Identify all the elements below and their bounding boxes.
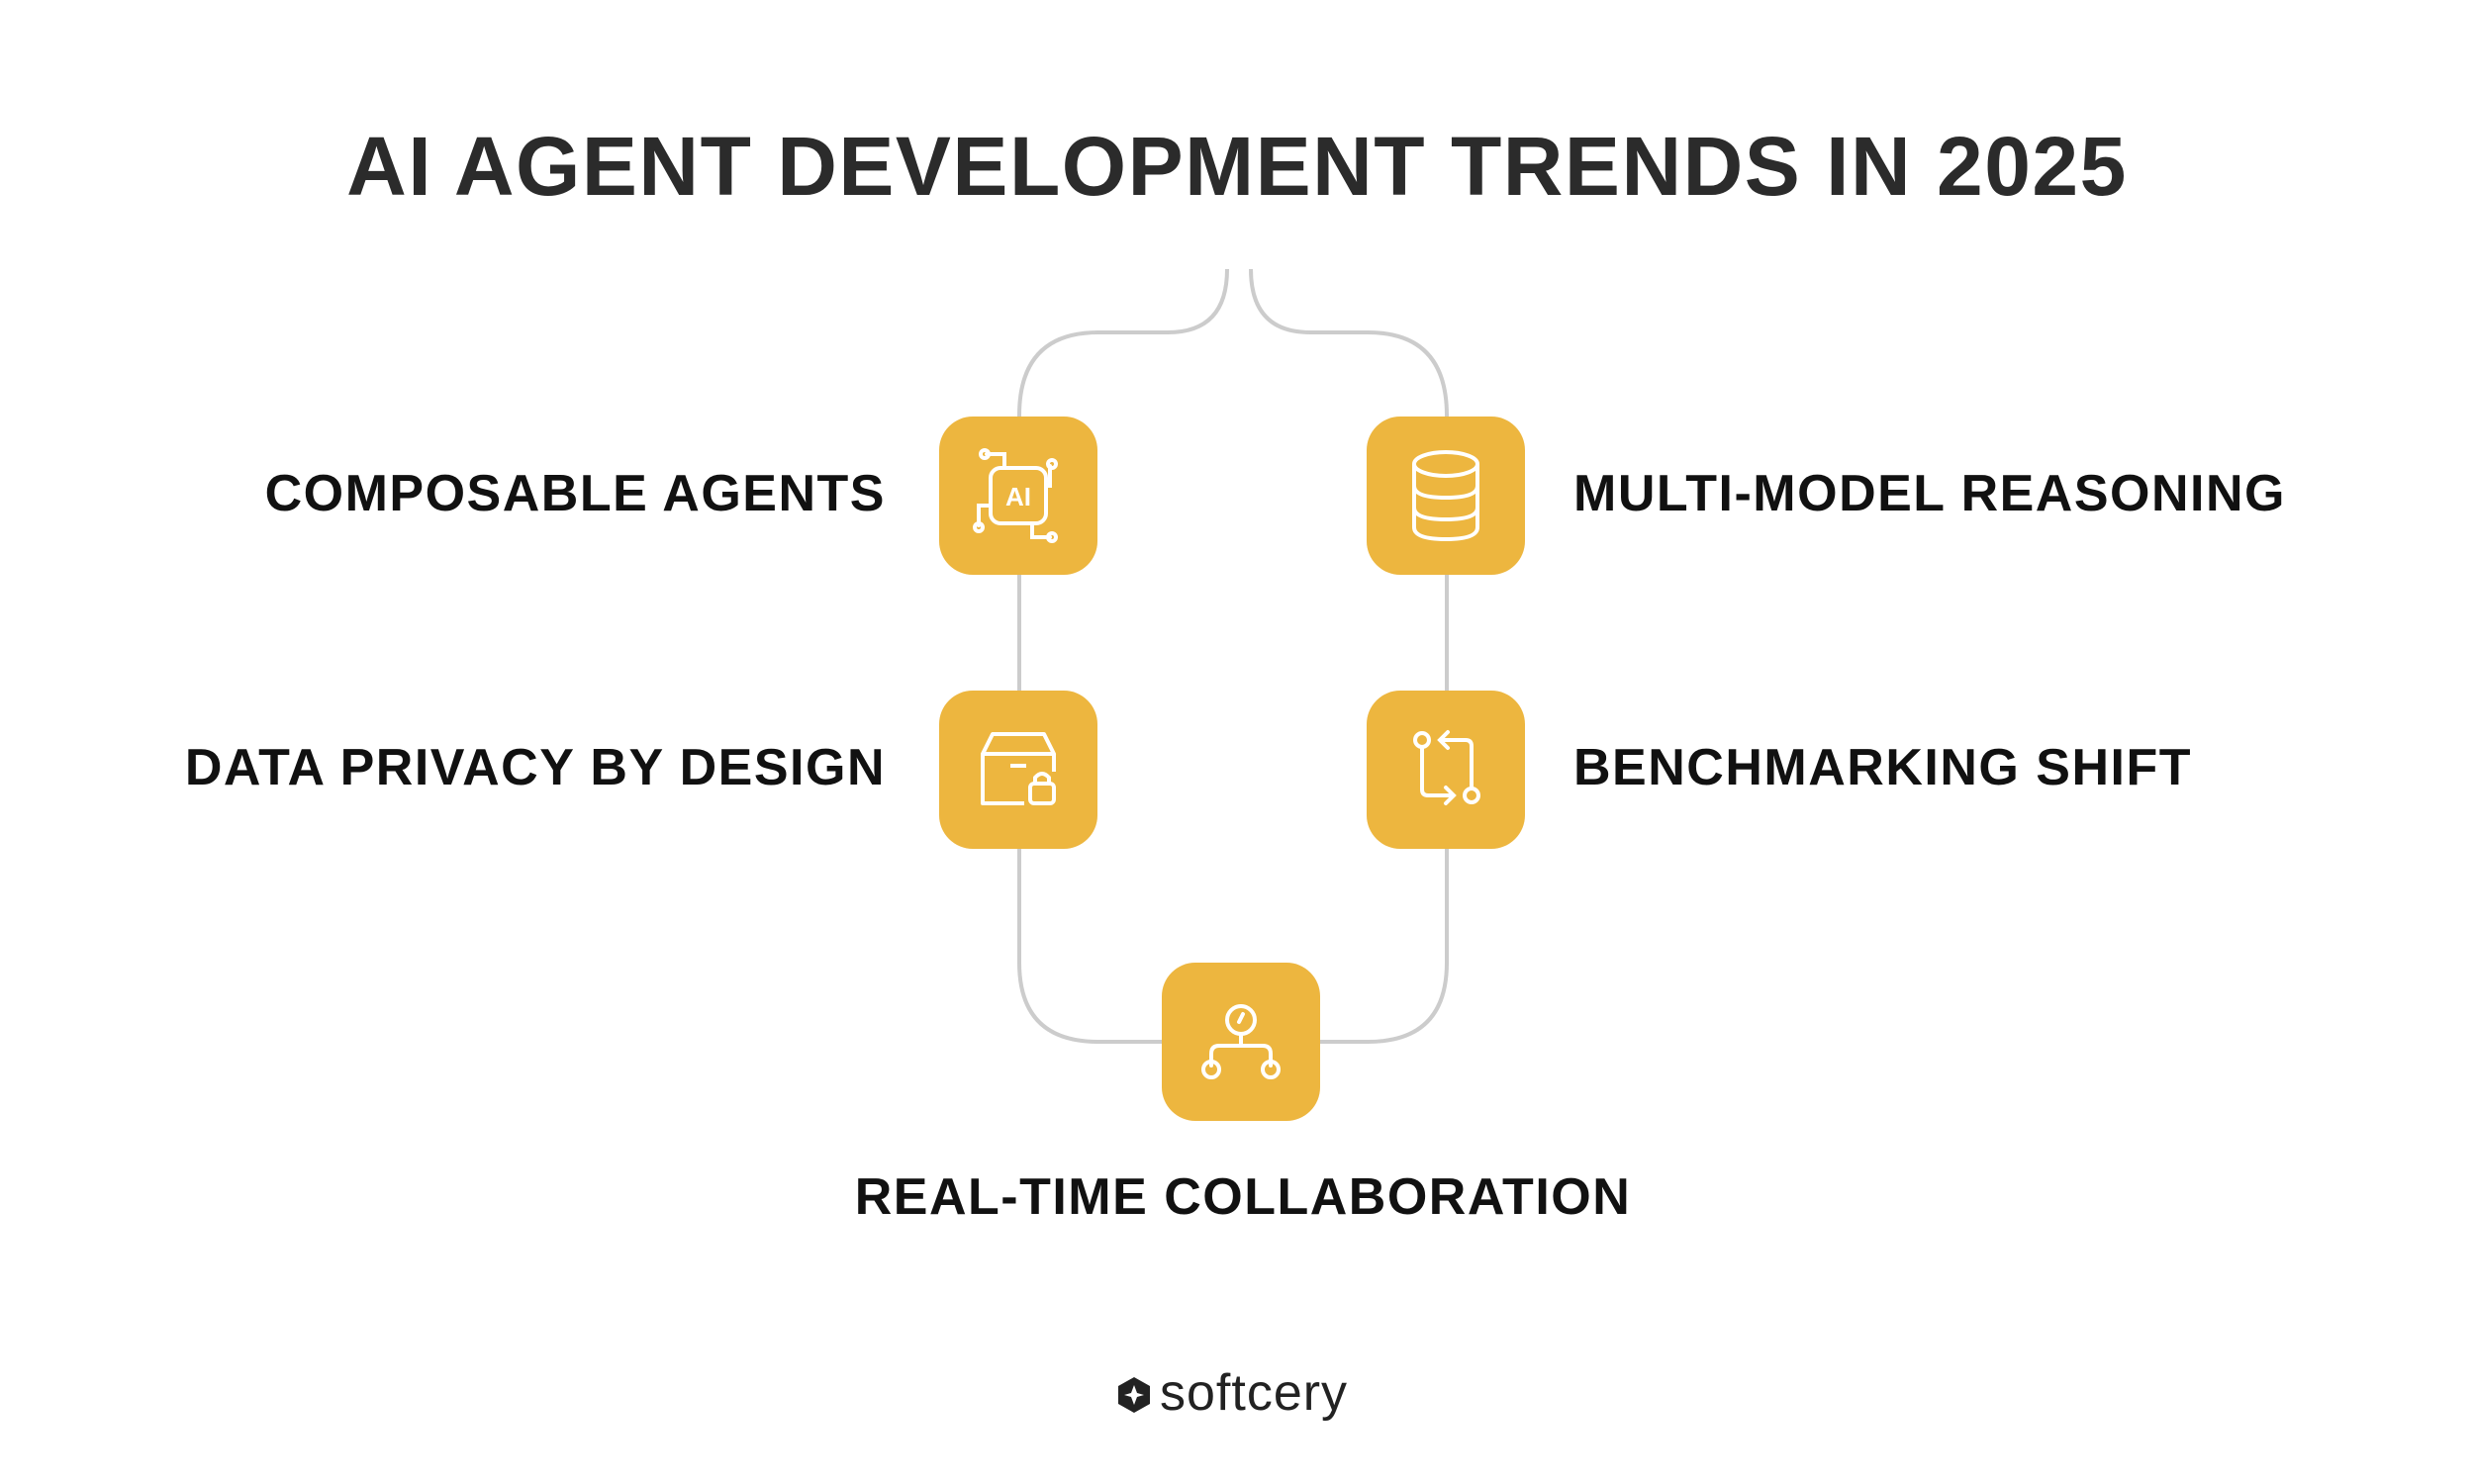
icon: composable agents — [939, 417, 1097, 575]
logo: softcery — [1160, 1364, 1348, 1422]
label: benchmarking shift: BENCHMARKING SHIFT — [1573, 739, 2192, 796]
label: data privacy: DATA PRIVACY BY DESIGN — [185, 739, 886, 796]
icon: composable agents: AI — [1005, 482, 1031, 511]
icon: benchmarking shift — [1367, 691, 1525, 849]
label: multi-model reasoning: MULTI-MODEL REASONING — [1573, 465, 2286, 522]
label: composable agents: COMPOSABLE AGENTS — [265, 465, 886, 522]
icon: data privacy — [939, 691, 1097, 849]
icon: multi-model reasoning — [1367, 417, 1525, 575]
label: real-time collaboration: REAL-TIME COLLABORATION — [855, 1168, 1631, 1226]
icon: real-time collaboration — [1162, 963, 1320, 1121]
title: AI AGENT DEVELOPMENT TRENDS IN 2025 — [346, 120, 2128, 213]
